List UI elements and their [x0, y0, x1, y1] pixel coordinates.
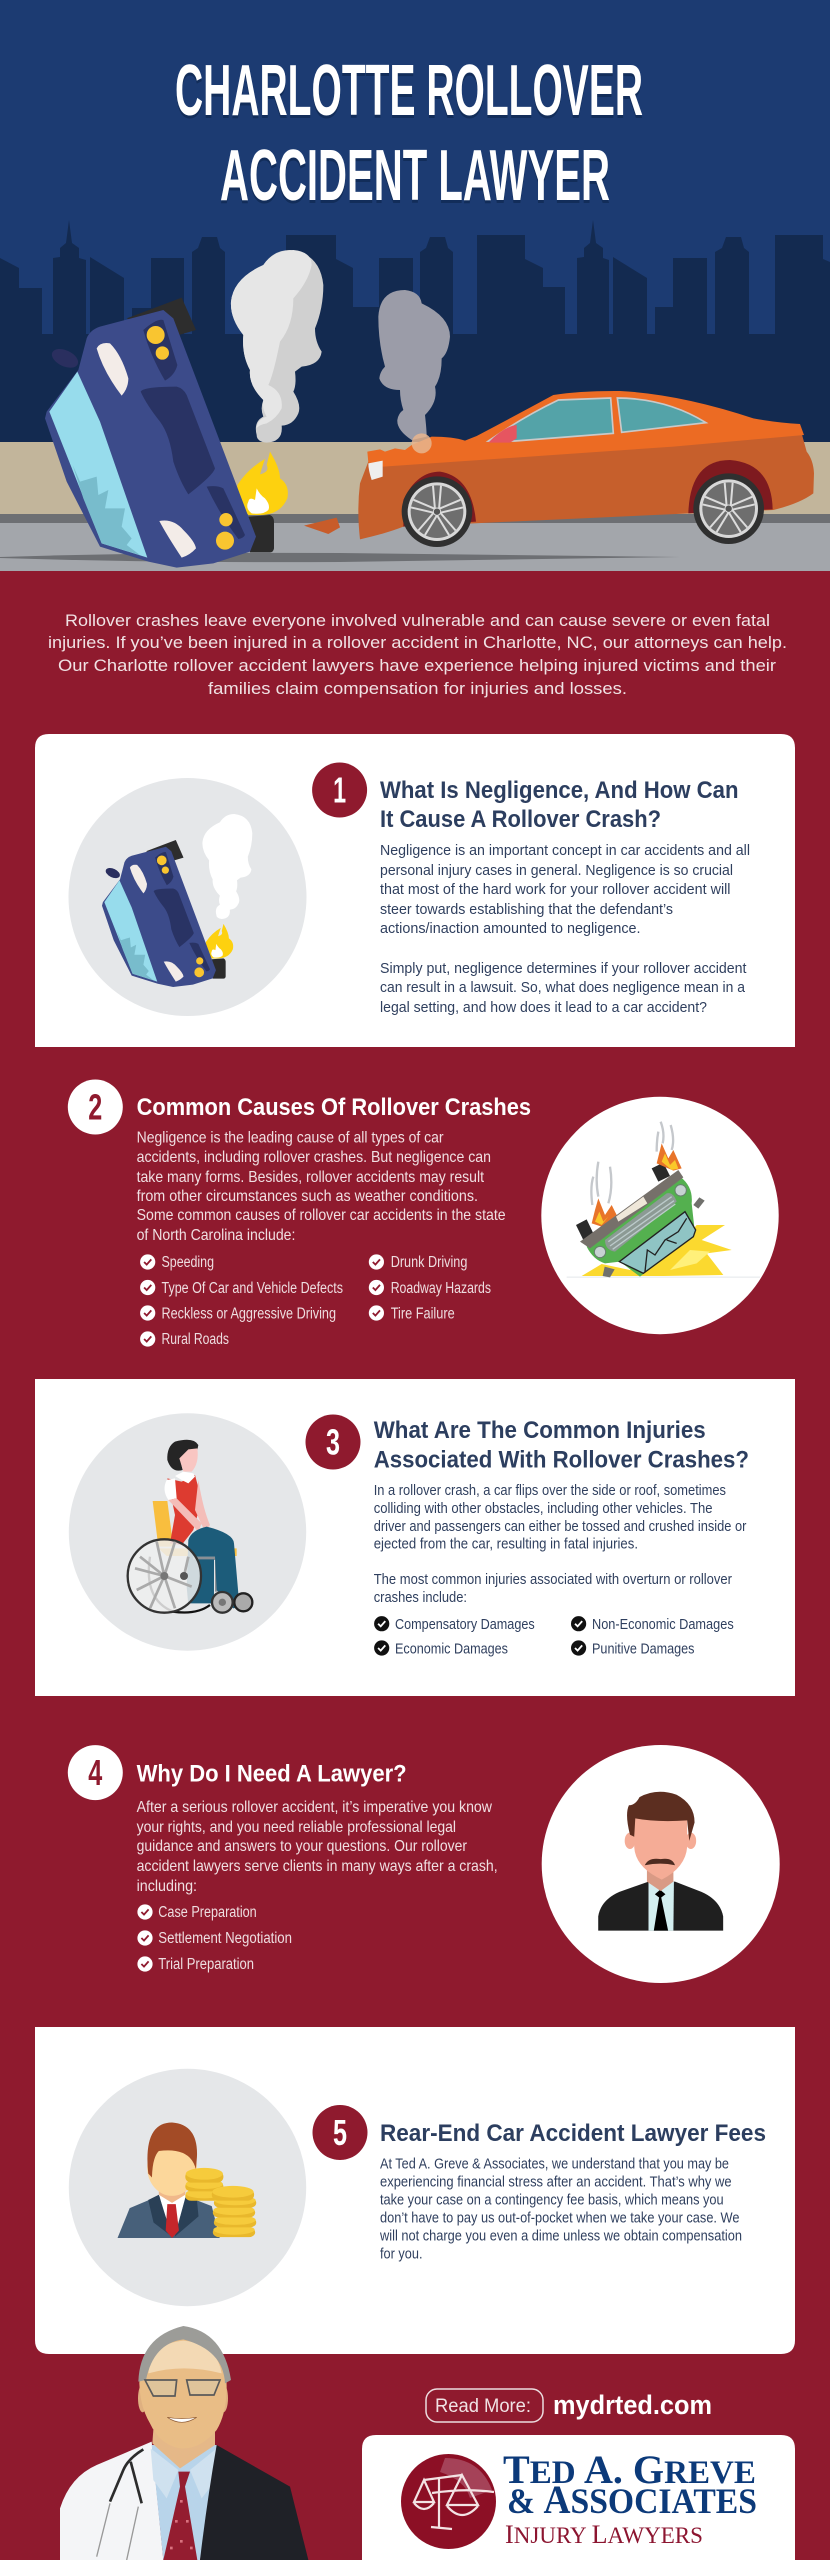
logo wordmark: & ASSOCIATES [507, 2477, 757, 2522]
icon: burning green car in white circle [541, 1097, 779, 1334]
checklist of causes: Reckless or Aggressive Driving [162, 1306, 336, 1322]
number badge 5: 5 [333, 2112, 347, 2153]
heading: It Cause A Rollover Crash? [380, 806, 661, 833]
body text: will not charge you even a dime unless we obtain compensation [379, 2227, 742, 2244]
logo card [362, 2435, 795, 2560]
number badge 4 [68, 1745, 123, 1800]
body text: Simply put, negligence determines if your rollover accident [380, 960, 747, 977]
number badge 3: 3 [326, 1422, 340, 1462]
body text: At Ted A. Greve & Associates, we understand that you may be [380, 2156, 729, 2173]
body text [380, 842, 750, 1016]
number badge 2 [68, 1080, 123, 1134]
logo emblem: scales of justice [401, 2454, 496, 2549]
icon: lawyer with moustache in white circle [542, 1745, 780, 1983]
icon: orange crashed car [358, 290, 814, 547]
body text: your rights, and you need reliable professional legal [137, 1819, 456, 1836]
icon: flipped blue car with flame [45, 298, 340, 568]
checklist of damages: Punitive Damages [592, 1640, 694, 1658]
intro text block: families claim compensation for injuries and losses. [208, 679, 627, 698]
checklist of causes: Roadway Hazards [391, 1280, 491, 1297]
logo wordmark: INJURY LAWYERS [505, 2520, 703, 2549]
body text: Negligence is the leading cause of all types of car [137, 1130, 444, 1146]
logo wordmark: TED A. GREVE [503, 2447, 756, 2492]
checklist of causes: Drunk Driving [391, 1254, 467, 1271]
heading [380, 777, 738, 833]
heading: Associated With Rollover Crashes? [374, 1446, 749, 1474]
body text: steer towards establishing that the defendant’s [380, 901, 673, 918]
body text: personal injury cases in general. Negligence is so crucial [380, 862, 733, 879]
number badge 1: 1 [333, 770, 346, 810]
number badge 2: 2 [88, 1086, 102, 1128]
body text: legal setting, and how does it lead to a car accident? [380, 999, 707, 1016]
icon: businessman with coins [69, 2069, 306, 2306]
number badge 5 [312, 2105, 368, 2160]
body text: accident lawyers serve clients in many ways after a crash, [137, 1858, 498, 1875]
portrait: Dr. Ted Greve [60, 2326, 308, 2560]
body text: of North Carolina include: [137, 1227, 295, 1244]
intro text block [48, 611, 787, 698]
body text: actions/inaction amounted to negligence. [380, 920, 640, 937]
icon: flipped car in grey circle [68, 778, 306, 1016]
checklist of damages: Economic Damages [395, 1640, 508, 1658]
read more link: Read More: [435, 2396, 531, 2417]
body text: crashes include: [374, 1589, 467, 1606]
body text: take many forms. Besides, rollover accidents may result [137, 1169, 484, 1186]
body text: experiencing financial stress after an accident. That’s why we [380, 2174, 732, 2190]
read more link: mydrted.com [553, 2390, 712, 2420]
number badge 4: 4 [88, 1752, 102, 1793]
panel: common causes [68, 1080, 779, 1348]
body text [137, 1130, 506, 1244]
heading: Rear-End Car Accident Lawyer Fees [380, 2120, 766, 2147]
heading: What Are The Common Injuries [374, 1417, 706, 1444]
body text: including: [137, 1878, 197, 1895]
body text: for you. [380, 2245, 422, 2262]
icon: light smoke column [231, 250, 323, 443]
number badge 3 [306, 1414, 360, 1470]
body text: Some common causes of rollover car accidents in the state [137, 1207, 506, 1224]
body text: colliding with other obstacles, including other vehicles. The [374, 1500, 712, 1517]
checklist of services: Case Preparation [158, 1904, 257, 1921]
intro text block: Our Charlotte rollover accident lawyers have experience helping injured victims and their [58, 656, 776, 675]
body text: After a serious rollover accident, it’s imperative you know [137, 1799, 492, 1816]
checklist of causes: Speeding [162, 1254, 214, 1271]
heading: What Is Negligence, And How Can [380, 777, 738, 804]
checklist of damages: Non-Economic Damages [592, 1616, 734, 1633]
body text: driver and passengers can either be tossed and crushed inside or [374, 1518, 746, 1535]
body text: take your case on a contingency fee basis, which means you [380, 2192, 724, 2208]
icon: woman in wheelchair [69, 1413, 306, 1651]
checklist of causes: Rural Roads [162, 1331, 229, 1348]
body text: don’t have to pay us out-of-pocket when we take your case. We [380, 2209, 740, 2226]
hero illustration: night street crash [0, 0, 830, 571]
body text: ejected from the car, resulting in fatal injuries. [374, 1536, 638, 1553]
heading: Why Do I Need A Lawyer? [137, 1761, 407, 1788]
checklist of causes [140, 1254, 491, 1348]
panel: common injuries [35, 1379, 795, 1696]
body text [379, 2156, 742, 2262]
body text: In a rollover crash, a car flips over the side or roof, sometimes [374, 1482, 726, 1499]
body text: from other circumstances such as weather conditions. [137, 1188, 478, 1205]
intro text block: injuries. If you’ve been injured in a rollover accident in Charlotte, NC, our attorneys can help. [48, 633, 787, 652]
number badge 1 [312, 762, 367, 818]
checklist of causes: Type Of Car and Vehicle Defects [162, 1280, 343, 1297]
panel: what is negligence [35, 734, 795, 1047]
heading: Common Causes Of Rollover Crashes [137, 1094, 531, 1121]
body text: The most common injuries associated with overturn or rollover [374, 1571, 732, 1588]
checklist of damages: Compensatory Damages [395, 1616, 535, 1633]
body text: Negligence is an important concept in car accidents and all [380, 842, 750, 859]
logo wordmark [503, 2447, 757, 2549]
panel: lawyer fees [35, 2027, 795, 2354]
checklist of causes: Tire Failure [391, 1306, 455, 1322]
body text: guidance and answers to your questions. Our rollover [137, 1838, 468, 1855]
title [175, 51, 643, 216]
checklist of services: Settlement Negotiation [158, 1930, 292, 1947]
body text: accidents, including rollover crashes. But negligence can [137, 1149, 491, 1166]
body text: that most of the hard work for your rollover accident will [380, 881, 730, 898]
panel: why do I need a lawyer [68, 1745, 780, 1983]
heading [374, 1417, 749, 1474]
body text [137, 1799, 498, 1895]
checklist of services [137, 1904, 292, 1973]
read more link [426, 2389, 712, 2422]
intro text block: Rollover crashes leave everyone involved vulnerable and can cause severe or even fatal [65, 611, 770, 630]
body text: can result in a lawsuit. So, what does negligence mean in a [380, 979, 746, 996]
checklist of damages [374, 1616, 734, 1658]
body text [374, 1482, 746, 1606]
checklist of services: Trial Preparation [158, 1956, 254, 1973]
